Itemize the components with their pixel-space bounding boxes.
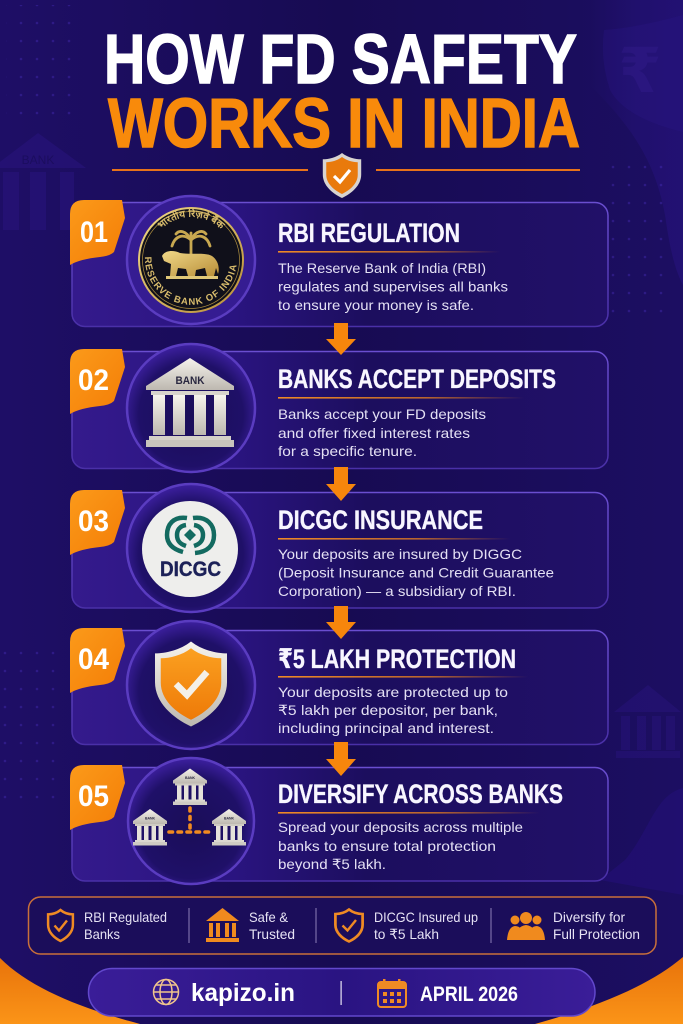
text: diversify: Full Protection xyxy=(553,926,640,942)
decorative bank bottom right xyxy=(614,685,681,758)
icon: orange bank xyxy=(206,908,239,942)
icon: people xyxy=(507,912,545,940)
heading: RBI REGULATION xyxy=(278,218,460,248)
body text: The Reserve Bank of India (RBI) xyxy=(278,260,486,276)
body text: regulates and supervises all banks xyxy=(278,278,508,294)
number badge 03: 03 xyxy=(78,505,109,538)
body text: Corporation) — a subsidiary of RBI. xyxy=(278,583,516,599)
body text: Banks accept your FD deposits xyxy=(278,406,486,422)
heading: DICGC INSURANCE xyxy=(278,505,483,535)
icon: RBI seal: भारतीय रिज़र्व बैंक xyxy=(158,208,226,228)
text: RBI regulated banks: Banks xyxy=(84,926,120,942)
icon: three connected banks xyxy=(128,758,254,884)
footer pill xyxy=(88,968,595,1016)
arrow 4 to 5 xyxy=(326,742,356,776)
orange bottom corners xyxy=(0,957,683,1024)
title: WORKS IN INDIA xyxy=(108,84,580,162)
number badge 01 xyxy=(70,200,125,265)
text: RBI regulated banks: RBI Regulated xyxy=(84,909,167,925)
number badge 04 xyxy=(70,628,125,693)
body text: banks to ensure total protection xyxy=(278,838,496,854)
body text xyxy=(278,260,508,313)
body text: to ensure your money is safe. xyxy=(278,297,474,313)
text: RBI regulated banks xyxy=(84,909,167,942)
text: DICGC insured xyxy=(374,909,478,942)
heading: ₹5 LAKH PROTECTION xyxy=(278,644,516,674)
icon: shield outline xyxy=(48,910,73,941)
icon: shield outline xyxy=(335,910,363,942)
title: HOW FD SAFETY xyxy=(104,20,577,98)
body text: and offer fixed interest rates xyxy=(278,425,470,441)
text: diversify: Diversify for xyxy=(553,909,625,925)
text: DICGC insured: to ₹5 Lakh xyxy=(374,926,439,942)
number badge 04: 04 xyxy=(78,643,109,676)
icon: calendar xyxy=(378,979,406,1007)
icon: bank building xyxy=(127,344,255,472)
decorative bank top left: BANK xyxy=(22,153,54,167)
website: kapizo.in xyxy=(191,979,295,1007)
number badge 05: 05 xyxy=(78,780,109,813)
icon: three connected banks: BANK xyxy=(185,776,196,780)
number badge 03 xyxy=(70,490,125,555)
number badge 02 xyxy=(70,349,125,414)
icon: orange shield xyxy=(127,621,255,749)
body text xyxy=(278,546,554,599)
icon: RBI seal: RESERVE BANK OF INDIA xyxy=(144,257,236,305)
panel: step 4 5 lakh protection xyxy=(70,621,608,749)
icon: RBI seal xyxy=(126,194,256,326)
body text xyxy=(278,819,523,872)
title divider with shield xyxy=(112,153,580,198)
title xyxy=(104,20,580,162)
icon: bank building: BANK xyxy=(176,375,205,387)
date: APRIL 2026 xyxy=(420,983,518,1006)
icon: three connected banks: BANK xyxy=(145,816,156,820)
icon: DICGC logo: DICGC xyxy=(160,558,221,581)
body text xyxy=(278,684,508,736)
body text: ₹5 lakh per depositor, per bank, xyxy=(278,702,498,718)
body text: beyond ₹5 lakh. xyxy=(278,856,386,872)
panel: step 1 RBI regulation xyxy=(70,194,609,328)
heading: BANKS ACCEPT DEPOSITS xyxy=(278,364,556,394)
panel: step 3 DICGC insurance xyxy=(70,484,608,612)
icon: DICGC logo xyxy=(127,484,255,612)
body text: Spread your deposits across multiple xyxy=(278,819,523,835)
body text xyxy=(278,406,486,459)
text: safe and trusted xyxy=(249,909,295,942)
text: diversify xyxy=(553,909,640,942)
summary strip xyxy=(28,897,656,954)
body text: Your deposits are insured by DIGGC xyxy=(278,546,522,562)
text: safe and trusted: Safe & xyxy=(249,909,289,925)
icon: three connected banks: BANK xyxy=(224,816,235,820)
icon: globe xyxy=(154,980,178,1004)
heading: DIVERSIFY ACROSS BANKS xyxy=(278,779,563,809)
panel: step 5 diversify across banks xyxy=(70,758,608,884)
decorative rupee mark: ₹ xyxy=(618,37,662,106)
number badge 05 xyxy=(70,765,125,830)
arrow 1 to 2 xyxy=(326,323,356,355)
decorative bank top left xyxy=(0,133,86,230)
arrow 2 to 3 xyxy=(326,467,356,501)
number badge 01: 01 xyxy=(80,216,108,249)
body text: (Deposit Insurance and Credit Guarantee xyxy=(278,564,554,580)
text: safe and trusted: Trusted xyxy=(249,926,295,942)
text: DICGC insured: DICGC Insured up xyxy=(374,909,478,925)
body text: Your deposits are protected up to xyxy=(278,684,508,700)
arrow 3 to 4 xyxy=(326,606,356,639)
number badge 02: 02 xyxy=(78,364,109,397)
body text: including principal and interest. xyxy=(278,720,494,736)
body text: for a specific tenure. xyxy=(278,443,417,459)
panel: step 2 banks accept deposits xyxy=(70,344,608,472)
